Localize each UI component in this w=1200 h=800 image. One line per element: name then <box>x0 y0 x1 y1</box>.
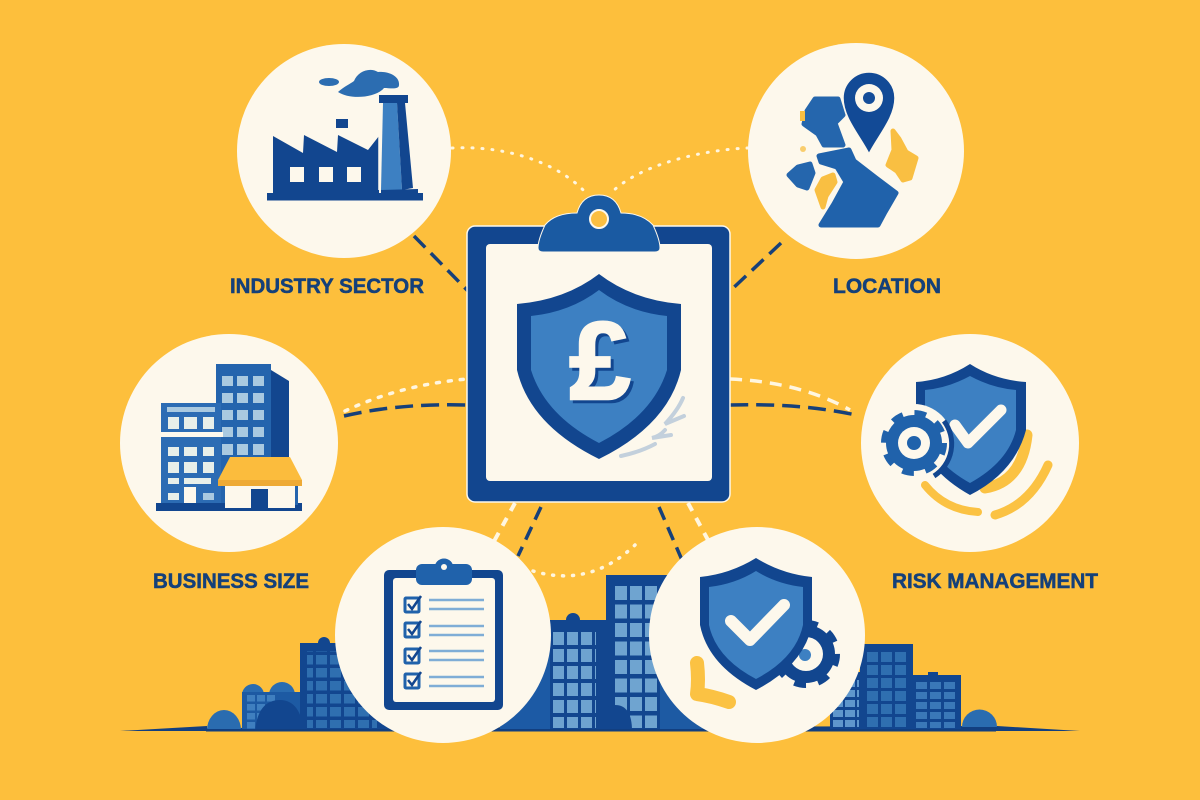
label: business size: BUSINESS SIZE <box>153 570 309 593</box>
icon: buildings and shop <box>156 364 302 511</box>
connector: business size to clipboard <box>344 379 467 416</box>
icon: gear <box>775 623 837 685</box>
label: risk management: RISK MANAGEMENT <box>892 570 1098 593</box>
connector: location to clipboard <box>612 148 781 291</box>
panel: risk management <box>861 334 1079 552</box>
panel: industry sector <box>237 44 451 258</box>
label: industry sector: INDUSTRY SECTOR <box>230 275 424 298</box>
icon: checklist clipboard <box>384 558 503 710</box>
icon: gear <box>875 404 953 482</box>
skyline <box>120 575 1080 732</box>
connector: risk management to clipboard <box>730 379 856 415</box>
icon: map with pin <box>789 72 916 225</box>
panel: central clipboard <box>467 195 730 502</box>
connector: compliance to clipboard <box>659 503 708 560</box>
icon: factory <box>267 70 423 200</box>
icon: shield with pound sign: £ <box>569 300 631 423</box>
icon: shield with check <box>700 558 812 690</box>
clipboard clip <box>538 195 660 252</box>
icon: shield with pound sign: £ <box>572 303 634 426</box>
connector: checklist to clipboard <box>492 503 635 576</box>
icon: shield with pound sign <box>517 274 681 459</box>
panel: compliance shield <box>649 527 865 743</box>
icon: yellow arcs <box>925 435 1048 515</box>
scratches <box>621 398 684 456</box>
panel: business size <box>120 334 338 552</box>
connector: industry to clipboard <box>414 148 585 291</box>
panel: checklist <box>335 527 551 743</box>
icon: shield with check <box>916 364 1026 495</box>
label: location: LOCATION <box>833 275 941 298</box>
icon: yellow blob <box>697 663 729 702</box>
panel: location <box>748 43 964 259</box>
